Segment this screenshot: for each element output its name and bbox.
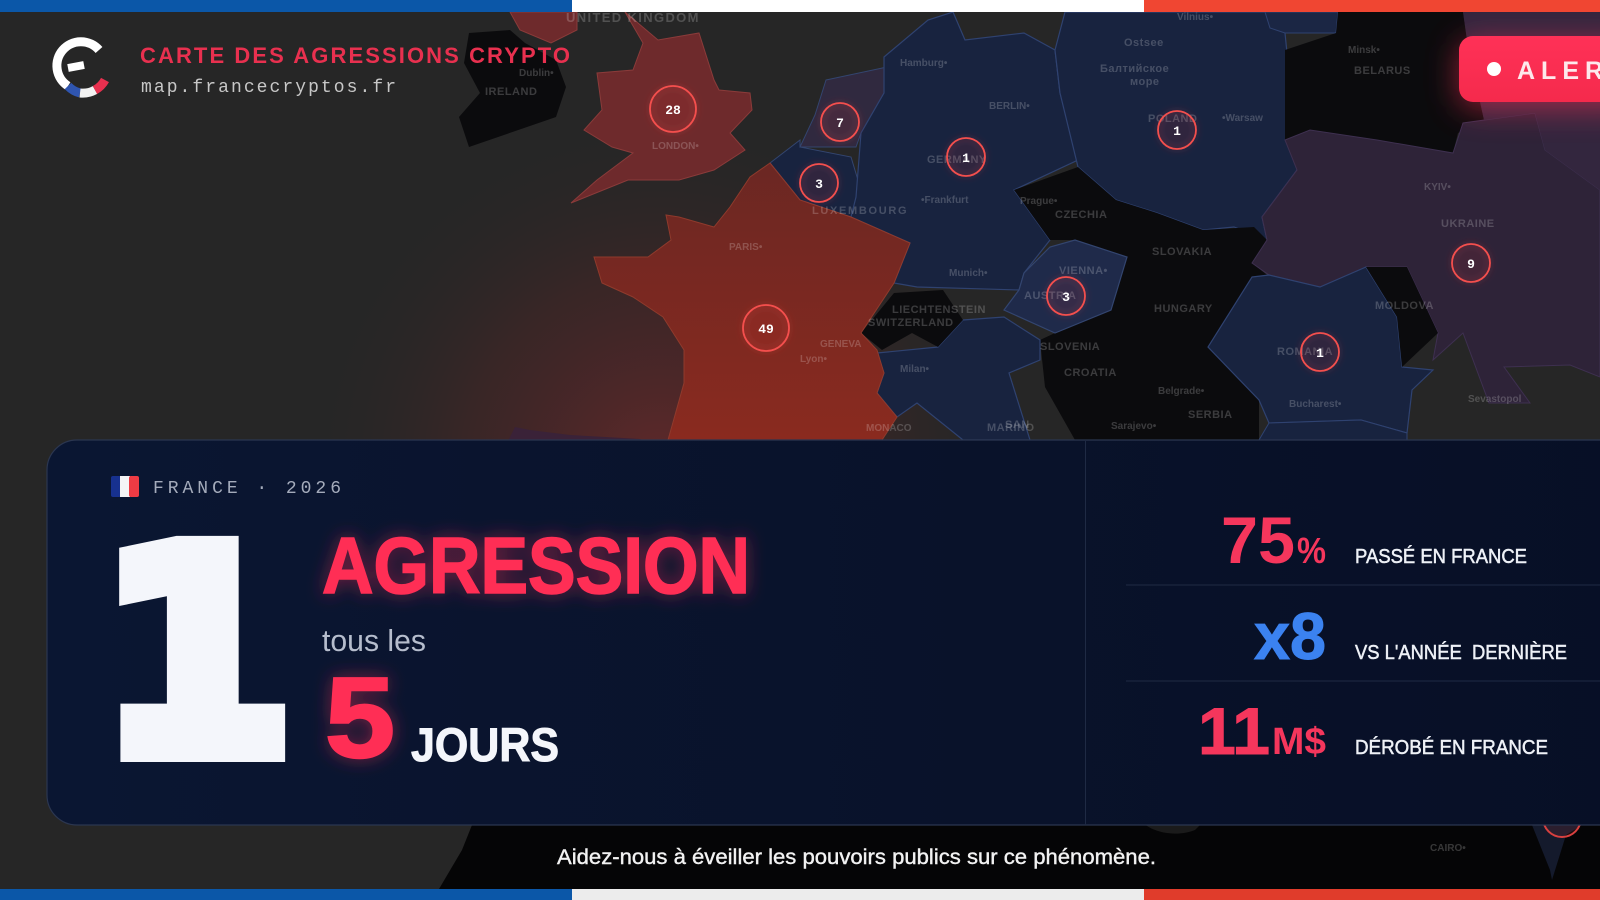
map labels: LUXEMBOURG <box>812 205 907 217</box>
map marker: France 49 <box>743 305 789 351</box>
stat: 75%: 75 <box>1221 503 1295 577</box>
logo blue arc <box>68 86 80 93</box>
map labels: Belgrade• <box>1158 386 1205 397</box>
country: Poland <box>1055 12 1297 240</box>
logo F bar <box>68 65 84 68</box>
map marker: UK 28: 28 <box>665 103 681 118</box>
map labels: LIECHTENSTEIN <box>892 304 986 316</box>
map labels: MOLDOVA <box>1375 300 1434 312</box>
map labels: IRELAND <box>485 86 537 98</box>
row divider <box>1126 584 1600 586</box>
map labels: Lyon• <box>800 354 828 365</box>
stat: 11M$ <box>1198 694 1548 768</box>
map labels: UKRAINE <box>1441 218 1495 230</box>
Africa landmass under panel: CAIRO• <box>1430 843 1466 854</box>
number 5: 5 <box>325 655 395 782</box>
map marker: Ukraine 9: 9 <box>1467 257 1475 272</box>
stat: 75%: % <box>1297 530 1326 571</box>
country: Lithuania <box>1265 12 1338 33</box>
map labels: SWITZERLAND <box>868 317 954 329</box>
map marker: Poland 1: 1 <box>1173 124 1181 139</box>
map labels: PARIS• <box>729 242 763 253</box>
map labels <box>485 10 1522 434</box>
map labels: Munich• <box>949 268 988 279</box>
map labels: CZECHIA <box>1055 209 1107 221</box>
country: Ukraine <box>1252 113 1600 403</box>
heading: AGRESSION: AGRESSION <box>322 521 750 610</box>
country: Belarus <box>1285 12 1484 153</box>
map labels: •Frankfurt <box>921 195 969 206</box>
map labels: Sarajevo• <box>1111 421 1157 432</box>
icon: French flag <box>111 476 139 497</box>
map labels: SAN <box>1005 419 1030 431</box>
map labels: MONACO <box>866 423 912 434</box>
tag: France 2026: FRANCE · 2026 <box>153 479 341 499</box>
map labels: BELARUS <box>1354 65 1411 77</box>
logo <box>57 42 105 93</box>
country: Bulgaria <box>1259 420 1407 440</box>
map marker: Belgium 3 <box>800 164 838 202</box>
map labels: Minsk• <box>1348 45 1380 56</box>
hero number 1: 1 <box>99 492 293 818</box>
title: CARTE DES AGRESSIONS CRYPTO <box>140 43 570 68</box>
stat: 11M$: 11 <box>1198 694 1270 768</box>
text: JOURS: JOURS <box>411 718 559 771</box>
map labels: UNITED KINGDOM <box>566 10 699 25</box>
map marker: Romania 1: 1 <box>1316 346 1324 361</box>
row divider <box>1126 680 1600 682</box>
bottom tricolor bar <box>0 889 1600 900</box>
stat: x8: x8 <box>1254 599 1326 673</box>
Africa landmass under panel <box>439 799 1600 889</box>
country: Switzerland <box>861 290 963 350</box>
subtitle url: map.francecryptos.fr <box>141 78 396 98</box>
country: United Kingdom <box>510 12 752 203</box>
map marker: Poland 1 <box>1158 111 1196 149</box>
stat: x8: VS L'ANNÉE DERNIÈRE <box>1355 641 1567 664</box>
logo white arc <box>80 90 95 93</box>
map labels: AUSTRIA <box>1024 290 1076 302</box>
footer message: Aidez-nous à éveiller les pouvoirs publics sur ce phénomène. <box>557 846 1156 869</box>
map labels: SLOVAKIA <box>1152 246 1212 258</box>
map labels: Sevastopol <box>1468 394 1522 405</box>
logo red arc <box>95 80 105 90</box>
map marker: Austria 3: 3 <box>1062 290 1070 305</box>
map marker: UK 28 <box>650 86 696 132</box>
map labels: Ostsee <box>1124 37 1164 49</box>
country: Central Europe dark block <box>1014 167 1267 440</box>
country: Ireland <box>459 30 566 147</box>
map marker: Ukraine 9 <box>1452 244 1490 282</box>
map labels: LONDON• <box>652 141 699 152</box>
stat: 11M$: DÉROBÉ EN FRANCE <box>1355 736 1548 759</box>
country: Russia edge <box>1463 12 1600 190</box>
map marker: Belgium 3: 3 <box>815 177 823 192</box>
map labels: GENEVA <box>820 339 862 350</box>
map labels: Milan• <box>900 364 930 375</box>
country: Belgium and Netherlands <box>770 67 887 217</box>
map labels: POLAND <box>1148 113 1197 125</box>
map labels: Балтийское <box>1100 63 1169 75</box>
country: Romania <box>1208 267 1433 433</box>
map labels: •Warsaw <box>1222 113 1263 124</box>
map marker: France 49: 49 <box>758 322 774 337</box>
map labels: море <box>1130 76 1160 88</box>
map labels: BERLIN• <box>989 101 1030 112</box>
map labels: Vilnius• <box>1177 12 1214 23</box>
stat: 75% <box>1221 503 1527 577</box>
map labels: Prague• <box>1020 196 1058 207</box>
badge glow <box>1459 42 1600 108</box>
map labels: GERMANY <box>927 154 987 166</box>
stat: 75%: PASSÉ EN FRANCE <box>1355 545 1527 568</box>
map labels: KYIV• <box>1424 182 1451 193</box>
map marker: Romania 1 <box>1301 333 1339 371</box>
map labels: MARINO <box>987 422 1035 434</box>
main stats panel <box>47 440 1600 825</box>
map marker: Germany 1 <box>947 138 985 176</box>
map labels: SLOVENIA <box>1040 341 1100 353</box>
stat: x8 <box>1254 599 1567 673</box>
map labels: VIENNA• <box>1059 265 1108 277</box>
panel divider <box>1084 441 1086 825</box>
text: tous les: tous les <box>322 623 426 658</box>
country: Spain edge <box>508 427 643 441</box>
logo white C arc <box>57 42 99 86</box>
map labels: Bucharest• <box>1289 399 1342 410</box>
map marker: Germany 1: 1 <box>962 151 970 166</box>
country: France <box>594 163 910 440</box>
alert badge <box>1459 36 1600 108</box>
map marker: Netherlands 7 <box>821 103 859 141</box>
country: Moldova <box>1366 267 1438 367</box>
map marker: Netherlands 7: 7 <box>836 116 844 131</box>
map labels: HUNGARY <box>1154 303 1213 315</box>
country: Austria <box>1004 240 1127 333</box>
top tricolor bar <box>0 0 1600 12</box>
stat: 11M$: M$ <box>1272 721 1326 763</box>
map labels: Hamburg• <box>900 58 948 69</box>
map labels: CROATIA <box>1064 367 1117 379</box>
map marker: Austria 3 <box>1047 277 1085 315</box>
map labels: Dublin• <box>519 68 554 79</box>
country: Germany <box>851 12 1078 290</box>
map labels: SERBIA <box>1188 409 1233 421</box>
country: Italy <box>877 317 1040 440</box>
map labels: ROMANIA <box>1277 346 1333 358</box>
